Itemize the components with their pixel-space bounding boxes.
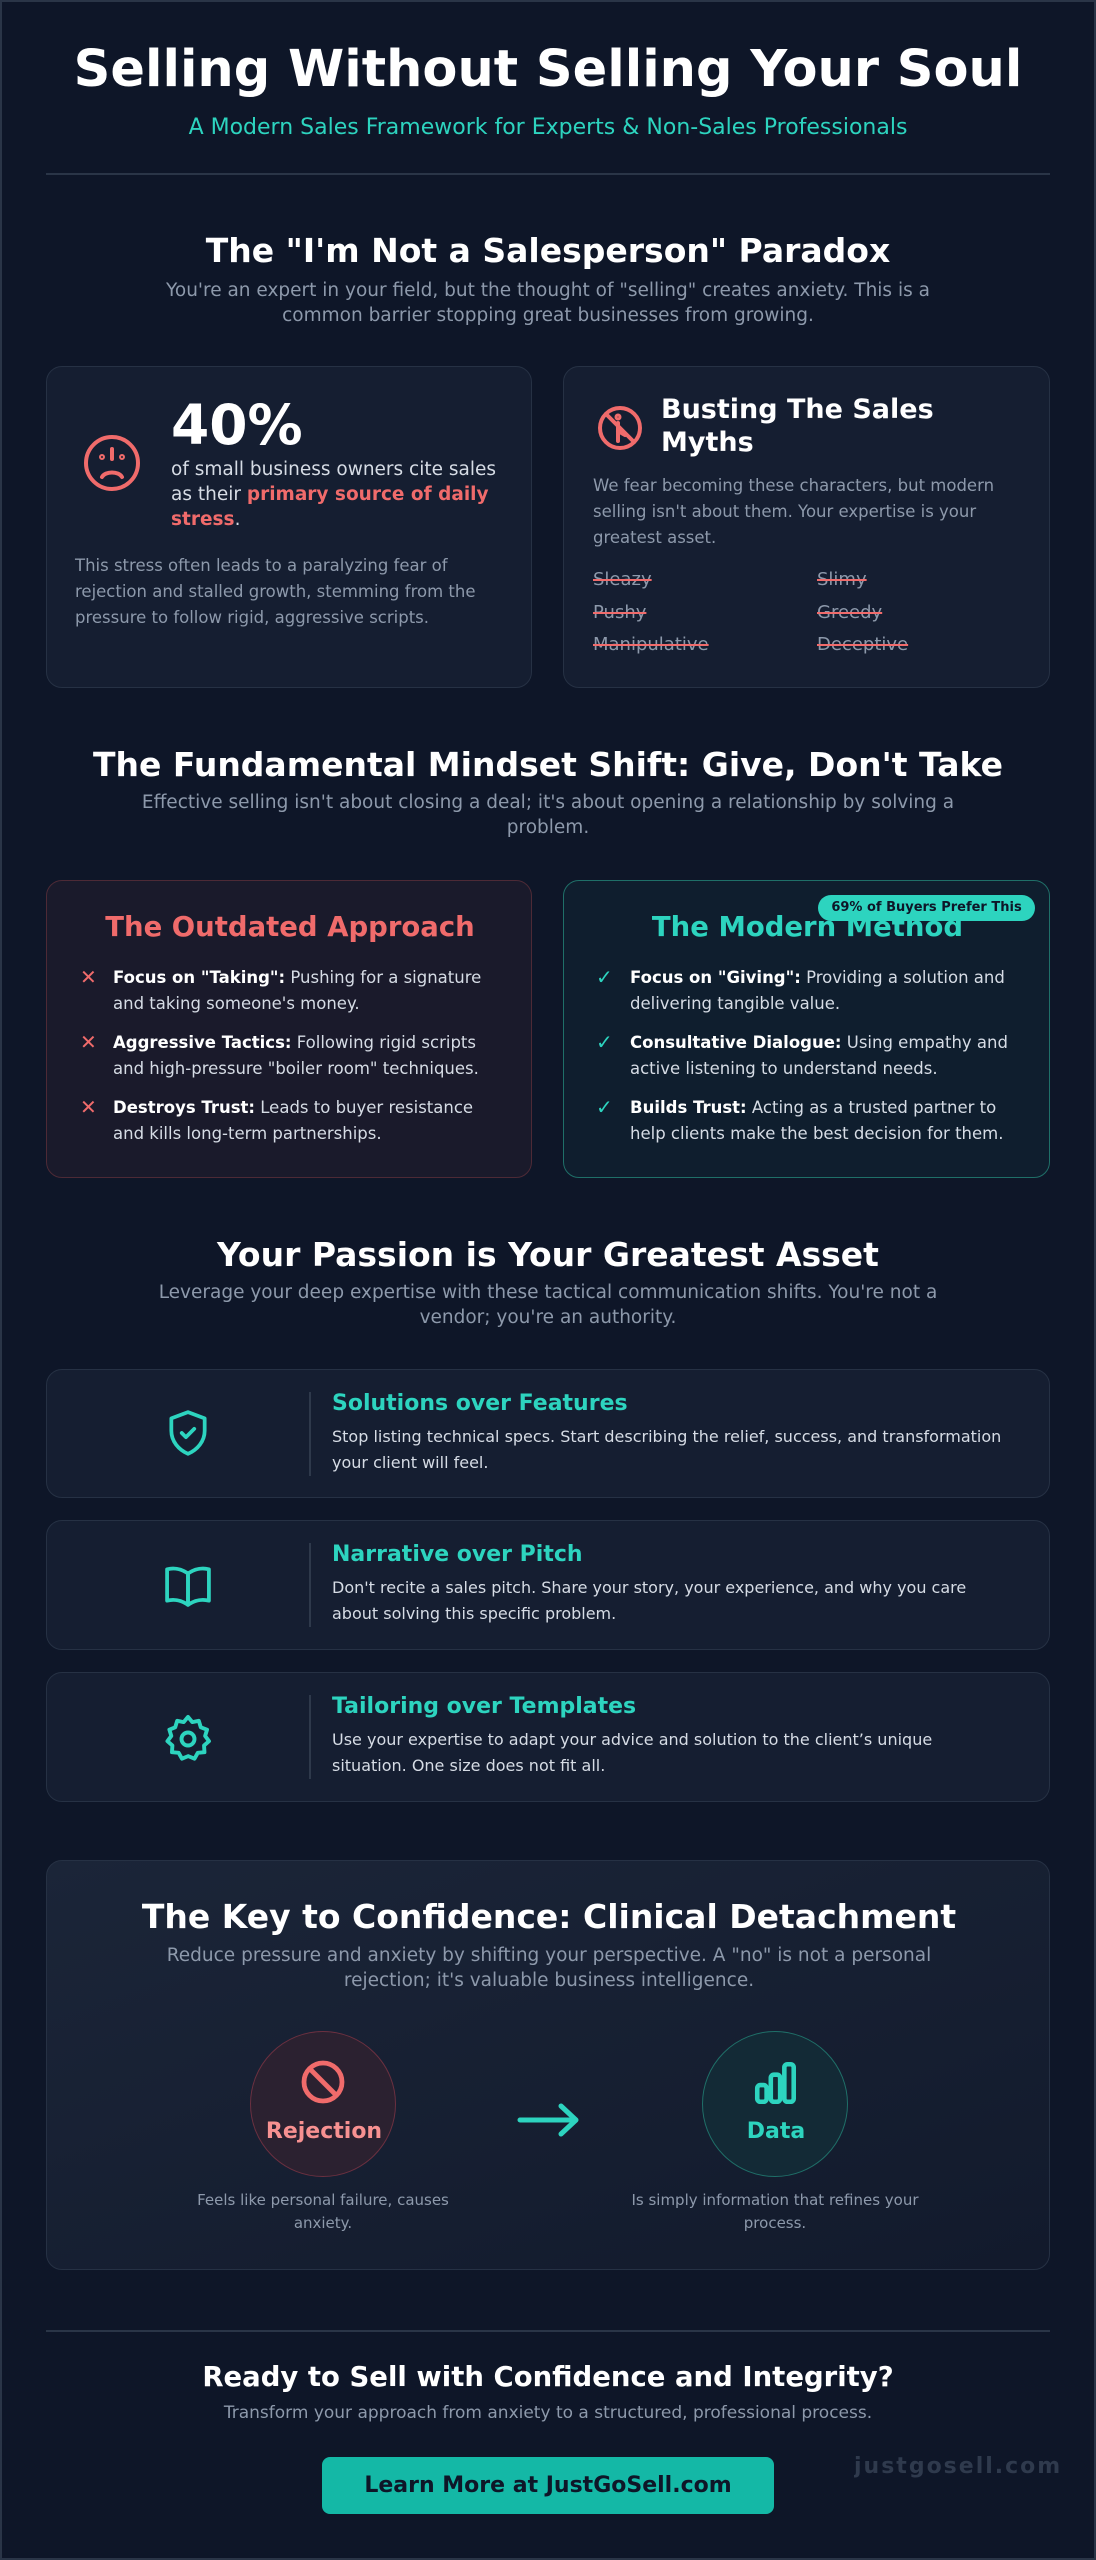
text: passion description: Leverage your deep expertise with these tactical communication shifts. You're not a vendor; you're an authority. bbox=[159, 1282, 937, 1328]
list: outdated items: ✕ bbox=[80, 1030, 97, 1054]
text: stat caption: of small business owners cite sales as their primary source of daily stress. bbox=[171, 459, 496, 530]
heading: busting myths bbox=[661, 394, 934, 458]
watermark: justgosell.com bbox=[854, 2454, 1062, 2479]
heading: clinical detachment: The Key to Confidence: Clinical Detachment bbox=[142, 1897, 956, 1936]
text: detachment description: Reduce pressure and anxiety by shifting your perspective. A "no" is not a personal rejection; it's valuable business intelligence. bbox=[167, 1945, 931, 1991]
list: myths: Manipulative bbox=[593, 634, 709, 655]
list: outdated items bbox=[80, 965, 481, 1143]
panel: 40% stat bbox=[46, 366, 532, 688]
heading: passion: Your Passion is Your Greatest Asset bbox=[217, 1235, 879, 1274]
text: narrative bbox=[332, 1542, 966, 1623]
icon: stressed face bbox=[84, 435, 140, 491]
icon: no person bbox=[598, 406, 642, 450]
icon: rejection circle: Rejection bbox=[266, 2119, 382, 2144]
list: modern items: ✓ bbox=[596, 1030, 613, 1054]
icon: open book bbox=[165, 1566, 211, 1607]
text: solutions bbox=[332, 1391, 1001, 1472]
icon: rejection circle bbox=[250, 2031, 396, 2177]
icon: gear bbox=[165, 1714, 211, 1761]
list: myths: Deceptive bbox=[817, 634, 908, 655]
list: modern items: Focus on "Giving": Providing a solution and delivering tangible value. bbox=[630, 968, 1005, 1013]
list: myths bbox=[593, 569, 908, 655]
button: learn more bbox=[322, 2457, 774, 2514]
panel: modern method bbox=[563, 880, 1050, 1178]
list: modern items: Consultative Dialogue: Using empathy and active listening to understand needs. bbox=[630, 1033, 1008, 1078]
list: modern items bbox=[596, 965, 1008, 1143]
heading: outdated approach: The Outdated Approach bbox=[105, 911, 475, 943]
text: rejection caption: Feels like personal failure, causes anxiety. bbox=[197, 2191, 449, 2232]
panel: sales myths bbox=[563, 366, 1050, 688]
panel: outdated approach bbox=[46, 880, 532, 1178]
stat: 40%: 40% bbox=[171, 393, 303, 457]
badge: 69% of buyers bbox=[818, 895, 1035, 921]
icon: shield check bbox=[169, 1410, 207, 1456]
text: tailoring bbox=[332, 1694, 932, 1775]
list: myths: Pushy bbox=[593, 602, 646, 623]
text: myths description: We fear becoming these characters, but modern selling isn't about them. Your expertise is your greatest asset. bbox=[593, 476, 994, 547]
title: Selling Without Selling Your Soul bbox=[74, 40, 1022, 99]
panel: clinical detachment bbox=[46, 1860, 1050, 2270]
list: modern items: ✓ bbox=[596, 965, 613, 989]
icon: data circle bbox=[702, 2031, 848, 2177]
text: solutions: Solutions over Features bbox=[332, 1391, 628, 1416]
text: mindset description: Effective selling isn't about closing a deal; it's about opening a relationship by solving a problem. bbox=[142, 792, 954, 838]
heading: paradox: The "I'm Not a Salesperson" Paradox bbox=[206, 231, 890, 270]
text: tailoring: Use your expertise to adapt your advice and solution to the client’s unique situation. One size does not fit all. bbox=[332, 1730, 932, 1775]
text: narrative: Narrative over Pitch bbox=[332, 1542, 583, 1567]
list: myths: Slimy bbox=[817, 569, 867, 590]
list: myths: Greedy bbox=[817, 602, 882, 623]
text: paradox description: You're an expert in your field, but the thought of "selling" creates anxiety. This is a common barrier stopping great businesses from growing. bbox=[166, 280, 930, 326]
heading: mindset shift: The Fundamental Mindset Shift: Give, Don't Take bbox=[93, 745, 1003, 784]
list: outdated items: ✕ bbox=[80, 1095, 97, 1119]
panel: solutions over features bbox=[46, 1369, 1050, 1498]
list: outdated items: Destroys Trust: Leads to buyer resistance and kills long-term partnerships. bbox=[113, 1098, 473, 1143]
button: learn more: Learn More at JustGoSell.com bbox=[364, 2473, 732, 2498]
list: modern items: Builds Trust: Acting as a trusted partner to help clients make the best decision for them. bbox=[630, 1098, 1003, 1143]
list: modern items: ✓ bbox=[596, 1095, 613, 1119]
heading: busting myths: Busting The Sales bbox=[661, 394, 934, 425]
text: CTA sub: Transform your approach from anxiety to a structured, professional process. bbox=[224, 2403, 872, 2423]
panel: narrative over pitch bbox=[46, 1520, 1050, 1650]
text: tailoring: Tailoring over Templates bbox=[332, 1694, 636, 1719]
badge: 69% of buyers: 69% of Buyers Prefer This bbox=[831, 900, 1022, 915]
list: outdated items: Focus on "Taking": Pushing for a signature and taking someone's money. bbox=[113, 968, 481, 1013]
icon: data circle: Data bbox=[747, 2119, 805, 2144]
text: data caption: Is simply information that refines your process. bbox=[631, 2191, 919, 2232]
arrow bbox=[518, 2104, 578, 2136]
heading: CTA: Ready to Sell with Confidence and Integrity? bbox=[202, 2361, 894, 2393]
heading: modern method: The Modern Method bbox=[652, 911, 963, 943]
list: outdated items: ✕ bbox=[80, 965, 97, 989]
list: outdated items: Aggressive Tactics: Following rigid scripts and high-pressure "boiler room" techniques. bbox=[113, 1033, 479, 1078]
list: myths: Sleazy bbox=[593, 569, 652, 590]
heading: busting myths: Myths bbox=[661, 427, 754, 458]
text: stress detail: This stress often leads to a paralyzing fear of rejection and stalled growth, stemming from the pressure to follow rigid, aggressive scripts. bbox=[75, 556, 475, 627]
subtitle: A Modern Sales Framework for Experts & Non-Sales Professionals bbox=[189, 115, 907, 140]
text: solutions: Stop listing technical specs. Start describing the relief, success, and transformation your client will feel. bbox=[332, 1427, 1001, 1472]
panel: tailoring over templates bbox=[46, 1672, 1050, 1802]
text: narrative: Don't recite a sales pitch. Share your story, your experience, and why you care about solving this specific problem. bbox=[332, 1578, 966, 1623]
